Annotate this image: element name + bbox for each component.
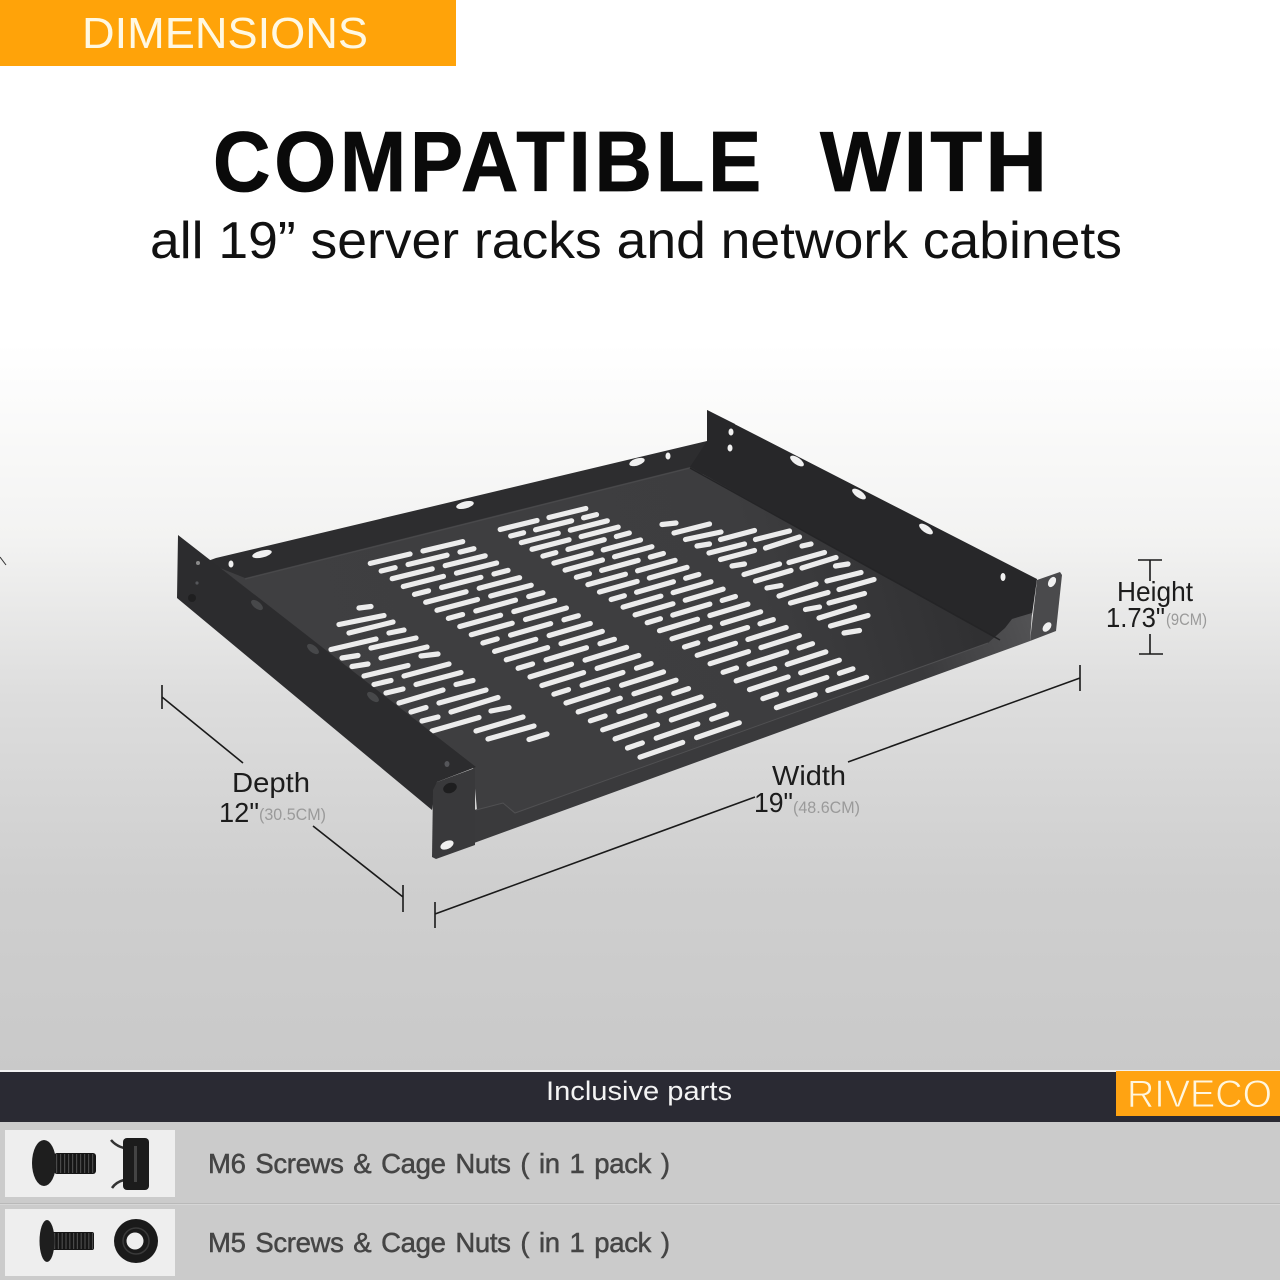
dimension: height: 1.73" xyxy=(1106,602,1165,633)
shelf floor xyxy=(220,467,1000,813)
vent slots: group A xyxy=(331,606,547,740)
vent slots: group B xyxy=(370,542,739,757)
icon: m6 screw xyxy=(32,1140,96,1186)
dimension: depth xyxy=(162,685,403,912)
icon: flange nut xyxy=(114,1219,158,1263)
title: WITH xyxy=(820,115,1050,210)
left flange xyxy=(177,535,476,810)
lip crease line xyxy=(476,643,988,813)
mounting holes xyxy=(188,428,1058,852)
stray corner mark xyxy=(0,557,6,565)
rack shelf product illustration xyxy=(177,410,1062,859)
part row: m6: M6 Screws & Cage Nuts ( in 1 pack ) xyxy=(208,1148,670,1179)
part row: m5 xyxy=(5,1209,670,1276)
header tab: dimensions xyxy=(0,0,456,66)
dimension: depth: 12" xyxy=(219,797,259,828)
icon: cage nut xyxy=(111,1138,149,1190)
logo: riveco: RIVECO xyxy=(1127,1073,1272,1116)
header tab: dimensions: DIMENSIONS xyxy=(82,9,368,58)
dimension: depth: (30.5CM) xyxy=(259,805,326,824)
dimension: height: Height xyxy=(1117,576,1193,607)
dimension: width xyxy=(435,665,1080,928)
title: COMPATIBLE xyxy=(213,115,765,210)
dimension: width: 19" xyxy=(754,787,793,818)
shelf right wall xyxy=(690,410,1037,642)
part row: m5: M5 Screws & Cage Nuts ( in 1 pack ) xyxy=(208,1227,670,1258)
dimension: width: (48.6CM) xyxy=(793,798,860,817)
right ear xyxy=(1030,572,1062,641)
front left ear xyxy=(432,768,475,859)
parts section background xyxy=(0,1122,1280,1280)
inclusive parts bar xyxy=(0,1070,1280,1122)
dimension: width: Width xyxy=(772,760,846,791)
dimension: height xyxy=(1106,560,1207,654)
vent slots: group D xyxy=(662,523,874,633)
row divider xyxy=(0,1203,1280,1205)
dimension: height: (9CM) xyxy=(1166,610,1207,629)
part row: m6 xyxy=(5,1130,670,1197)
inclusive parts bar: Inclusive parts xyxy=(546,1076,732,1106)
icon: m5 screw xyxy=(40,1220,94,1262)
vent slots: group C xyxy=(500,508,867,708)
dimension: depth: Depth xyxy=(232,767,310,798)
front lip xyxy=(474,613,1032,843)
shelf back wall xyxy=(205,410,735,582)
floor back crease xyxy=(245,468,690,579)
subtitle: all 19” server racks and network cabinets xyxy=(150,212,1122,270)
